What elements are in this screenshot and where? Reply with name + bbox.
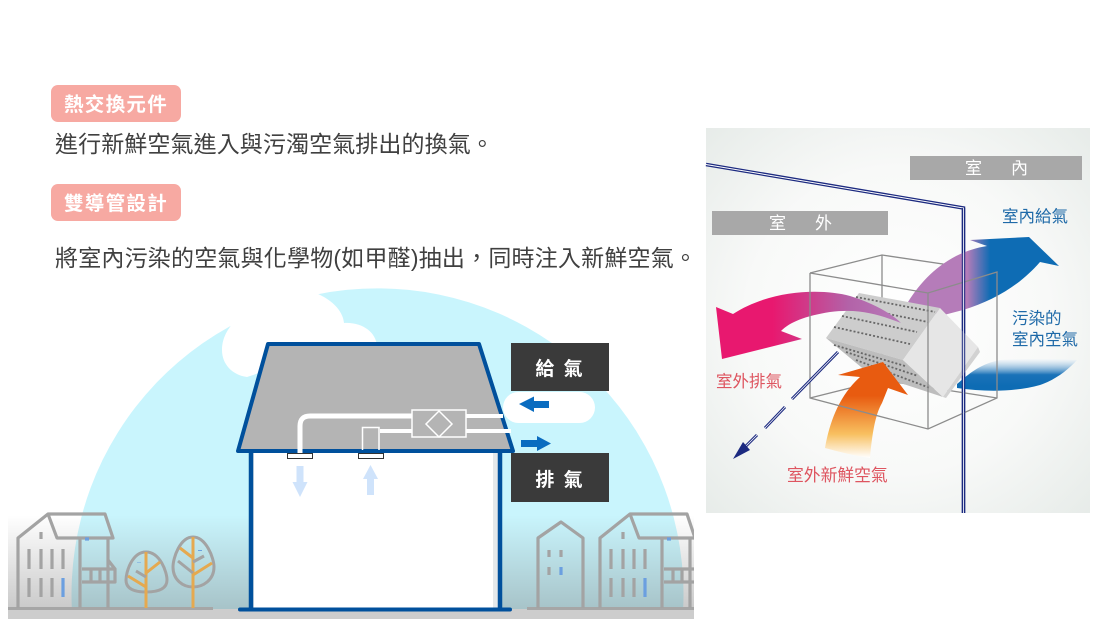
label: exhaust air [511, 453, 609, 502]
label: polluted indoor air: 室內空氣 [1012, 330, 1078, 349]
vent right [358, 454, 384, 458]
badge: dual duct design: 雙導管設計 [64, 192, 168, 215]
label: supply air [511, 343, 609, 391]
header: outdoor [712, 211, 888, 235]
label: exhaust air: 排 氣 [535, 469, 585, 491]
arrow: exhaust air out [521, 436, 551, 451]
roof [238, 344, 513, 451]
panel: heat exchanger diagram [706, 128, 1090, 513]
ground shading [8, 515, 694, 610]
arrow: indoor return [957, 359, 1077, 391]
arrow: room exhaust up [363, 465, 378, 495]
header: indoor [910, 156, 1082, 180]
label: outdoor fresh air: 室外新鮮空氣 [787, 466, 888, 485]
tree: small [126, 552, 167, 608]
sky dome [72, 288, 683, 610]
panel background [706, 128, 1090, 513]
wireframe front edges [810, 272, 997, 429]
text: dual duct description: 將室內污染的空氣與化學物(如甲醛)抽出，同時注入新鮮空氣。 [55, 245, 697, 271]
ground line left [8, 607, 213, 610]
building: small gabled house [538, 522, 583, 608]
header: outdoor: 外 [815, 214, 832, 233]
badge: heat exchange element [51, 85, 181, 122]
ground strip [8, 609, 694, 619]
ducts [300, 410, 511, 453]
header: indoor: 內 [1011, 159, 1028, 178]
vent left [288, 454, 312, 458]
header: indoor: 室 [965, 159, 982, 178]
label: polluted indoor air [1012, 309, 1078, 349]
dashed arrow: exhaust duct [733, 352, 838, 459]
label: indoor supply: 室內給氣 [1002, 207, 1068, 226]
house illustration [8, 288, 697, 619]
cloud behind roof [222, 292, 377, 377]
badge: dual duct design [51, 184, 181, 221]
building: left townhouse [18, 514, 115, 608]
arrow: supply air in [519, 396, 549, 412]
arrow: outdoor fresh [825, 362, 908, 458]
wall line [706, 164, 964, 513]
building: right townhouse [600, 514, 697, 608]
wall centre highlight [962, 208, 964, 513]
label: supply air: 給 氣 [535, 357, 585, 380]
label: polluted indoor air: 污染的 [1012, 309, 1062, 328]
badge: heat exchange element: 熱交換元件 [64, 93, 168, 116]
wireframe back edges [810, 255, 997, 398]
house body [240, 450, 510, 610]
heat exchange core [826, 293, 980, 398]
cloud beside house [503, 392, 595, 423]
heat exchanger unit [412, 410, 466, 437]
ground line right [527, 607, 694, 610]
arrow: room supply down [292, 466, 308, 497]
label: outdoor exhaust: 室外排氣 [716, 372, 782, 391]
text: heat exchange description: 進行新鮮空氣進入與污濁空氣排出的換氣。 [55, 131, 494, 157]
arrow: outdoor exhaust [716, 292, 901, 359]
header: outdoor: 室 [769, 214, 786, 233]
wall line over arrows [962, 208, 965, 513]
tree: large [173, 537, 214, 608]
arrow: indoor supply [908, 237, 1059, 316]
